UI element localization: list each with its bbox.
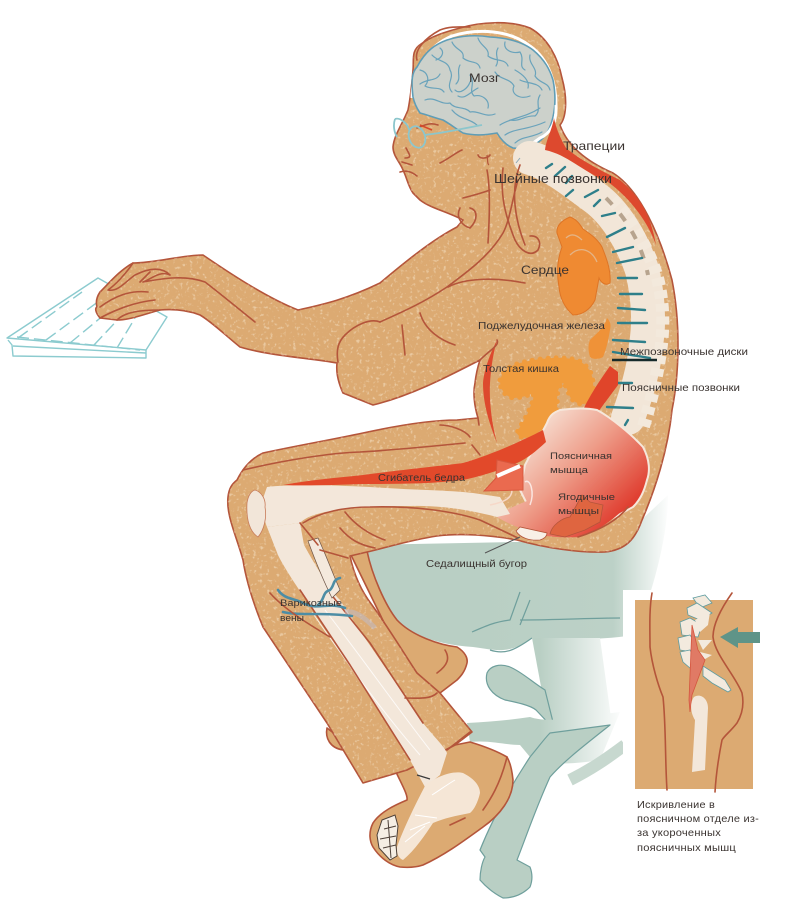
label: varicose veins: вены <box>280 613 304 624</box>
body silhouette <box>96 23 678 783</box>
inset: lumbar curve <box>623 590 800 860</box>
skull outline <box>412 31 556 160</box>
sciatic tuberosity leader line <box>485 537 520 553</box>
inner body lines <box>100 124 540 825</box>
label: varicose veins: Варикозные <box>280 598 342 609</box>
other leg calf <box>350 551 467 693</box>
toe bones <box>377 815 398 860</box>
label: psoas muscle: мышца <box>550 465 589 476</box>
label: ischial tuberosity: Седалищный бугор <box>426 558 527 570</box>
label: colon: Толстая кишка <box>483 364 559 375</box>
tibia edge lines <box>300 590 423 760</box>
inner hair strand <box>516 158 520 163</box>
chair backrest <box>672 245 690 320</box>
glasses <box>394 119 482 150</box>
keyboard <box>7 278 167 358</box>
chair post <box>532 638 612 735</box>
label: lumbar vertebrae: Поясничные позвонки <box>622 383 740 394</box>
human figure <box>90 20 690 867</box>
label: gluteal muscles: мышцы <box>558 506 599 517</box>
pancreas <box>588 318 611 359</box>
inset caption: поясничных мышц <box>637 843 736 854</box>
fibula <box>308 538 340 598</box>
inset caption: за укороченных <box>637 828 722 839</box>
earring <box>487 155 489 165</box>
inset psoas muscle <box>689 625 705 712</box>
inset arrow <box>720 627 760 648</box>
label: hip flexor: Сгибатель бедра <box>378 472 465 484</box>
label: psoas muscle: Поясничная <box>550 451 612 462</box>
trapezius muscle <box>545 118 656 245</box>
pelvis and hip <box>520 408 649 530</box>
patella <box>247 490 266 537</box>
inset body outlines <box>650 593 743 792</box>
chair back arm <box>486 665 555 730</box>
inset tan panel <box>635 600 753 789</box>
label: intervertebral discs: Межпозвоночные диски <box>620 347 748 358</box>
tibia bone <box>267 523 447 787</box>
lower back muscle <box>583 366 618 412</box>
inset caption <box>637 800 759 854</box>
ischial tuberosity <box>516 527 547 540</box>
inset caption: Искривление в <box>637 800 715 811</box>
chair main leg and caster <box>480 725 610 898</box>
gluteus muscles <box>497 465 640 537</box>
label: brain: Мозг <box>469 73 500 85</box>
varicose veins <box>278 578 352 616</box>
spinal discs <box>546 164 650 358</box>
foot bones <box>397 772 480 860</box>
label: cervical vertebrae: Шейные позвонки <box>494 172 612 186</box>
anatomical labels <box>280 73 748 624</box>
label: trapezius: Трапеции <box>563 139 625 153</box>
inset femur <box>691 696 708 772</box>
varicose vein fade <box>345 612 375 628</box>
spine <box>530 158 663 428</box>
abdominal muscle <box>483 340 497 443</box>
hip flexor muscle <box>283 430 546 485</box>
heart <box>557 217 610 315</box>
seat outline <box>472 592 620 652</box>
foot <box>370 742 513 867</box>
far foot calf patch <box>327 728 343 750</box>
inset caption: поясничном отделе из- <box>637 814 759 825</box>
inset vertebrae <box>678 595 731 692</box>
chair seat <box>360 495 668 650</box>
label: heart: Сердце <box>521 263 569 277</box>
inset white card <box>623 590 800 860</box>
tendon marks <box>417 775 430 779</box>
hair bun <box>417 27 470 60</box>
colon <box>500 358 593 438</box>
label: gluteal muscles: Ягодичные <box>558 492 615 503</box>
office chair <box>360 245 690 898</box>
lumbar discs <box>612 359 657 361</box>
femur bone <box>260 485 510 527</box>
brain <box>412 36 555 148</box>
skull back line <box>518 105 556 160</box>
skin speckle texture <box>90 20 690 790</box>
chair middle arm <box>467 712 620 763</box>
label: pancreas: Поджелудочная железа <box>478 321 605 332</box>
